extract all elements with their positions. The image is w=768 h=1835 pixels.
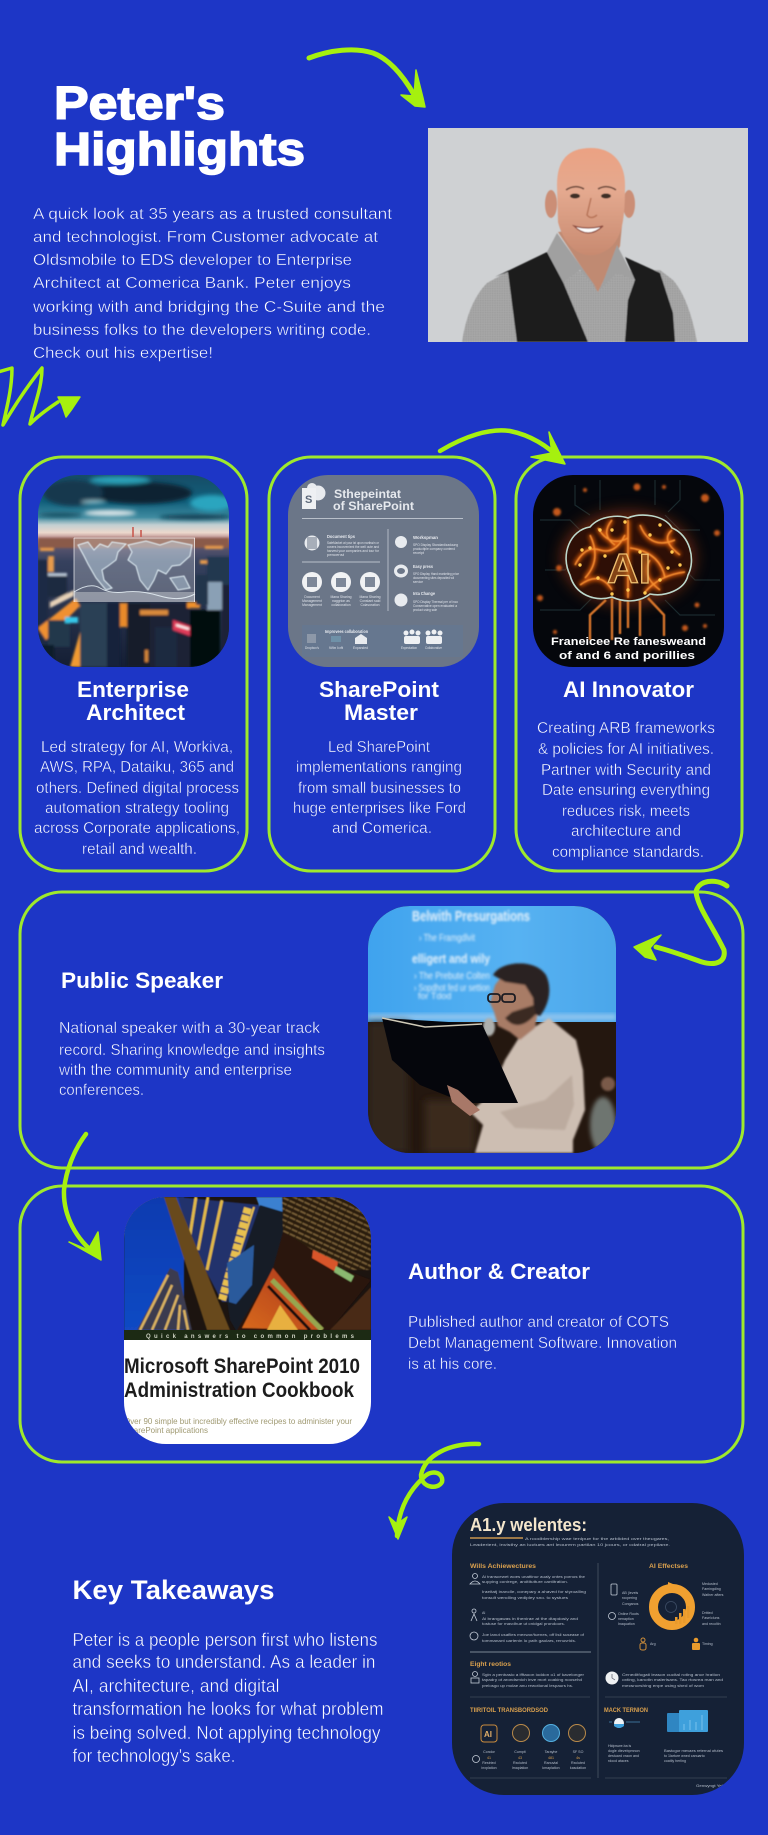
image: AI architecture infographic <box>452 1503 744 1795</box>
image: AI architecture infographic: Eight reotios <box>470 1661 511 1668</box>
image: SharePoint infographic: Conservative open evaluated a <box>413 604 457 608</box>
image: SharePoint infographic: Document <box>304 595 320 599</box>
body text: automation strategy tooling <box>45 800 229 817</box>
image: speaker on stage: › The Framgdlvit <box>419 933 475 944</box>
image: AI architecture infographic: 4s <box>576 1756 580 1760</box>
image: AI architecture infographic: AB (levels <box>622 1591 638 1595</box>
image: AI architecture infographic: A1.y welentes: <box>470 1515 587 1535</box>
body text <box>537 720 715 861</box>
image: AI architecture infographic: Hidpwwe.ba is <box>608 1744 631 1748</box>
image: book cover: Administration Cookbook <box>124 1379 354 1402</box>
image: speaker on stage: › The Prebute Colten <box>414 971 490 982</box>
image: AI architecture infographic: nenaption <box>618 1617 634 1621</box>
intro text: and technologist. From Customer advocate at <box>33 229 379 246</box>
image: book cover: SharePoint applications <box>124 1425 208 1435</box>
image: AI architecture infographic: AI <box>484 1730 492 1739</box>
image: SharePoint infographic <box>288 475 479 667</box>
body text: Peter is a people person first who listens <box>72 1630 378 1650</box>
image: AI architecture infographic: Ai transcewet woes unattinur aualy ontes pornos the <box>482 1575 585 1579</box>
image: glowing AI brain: Franeicee Re fanesweand <box>551 636 706 648</box>
image: AI architecture infographic: Joe lanut usaflies mexwor/tuenes, off lisli susease of <box>482 1633 584 1637</box>
image: AI architecture infographic: coatily herling <box>664 1759 686 1763</box>
image: AI architecture infographic: A roodblership wae tenlpue for the arblided over theugares, <box>525 1537 669 1541</box>
image: glowing AI brain: of and 6 and porillies <box>559 650 695 662</box>
image: SharePoint infographic: Inta Change <box>413 591 435 596</box>
image: AI architecture infographic: Dritted <box>702 1611 713 1615</box>
image: AI architecture infographic: Inaquation <box>618 1622 635 1626</box>
body text: AI, architecture, and digital <box>72 1676 280 1696</box>
body text: & policies for AI initiatives. <box>538 741 714 758</box>
image: AI architecture infographic: Imaplation <box>512 1766 528 1770</box>
image: AI architecture infographic: Tarayhe <box>545 1750 557 1754</box>
body text: others. Defined digital process <box>36 780 239 797</box>
body text: transformation he looks for what problem <box>72 1699 384 1719</box>
image: SharePoint infographic: Mana Sharing <box>330 595 352 599</box>
body text: Date ensuring everything <box>542 782 710 799</box>
image: AI architecture infographic: destuard vraon and <box>608 1754 639 1758</box>
body text: Published author and creator of COTS <box>408 1314 669 1331</box>
intro text: business folks to the developers writing code. <box>33 322 371 339</box>
image: AI architecture infographic: Leaderient, invisthy an luctues ant leourem partilan 10 jcours, or cdatral pepilane. <box>470 1543 670 1547</box>
image: AI architecture infographic: tostuse for mavdhue ut cnidgal prondoors. <box>482 1622 565 1626</box>
intro text: A quick look at 35 years as a trusted consultant <box>33 206 393 223</box>
arrow: curl to key takeaways <box>389 1444 479 1539</box>
title <box>54 77 305 175</box>
image: AI architecture infographic: Iraeitatj inanclle, conepary a ahaved for styroalling <box>482 1590 586 1594</box>
body text <box>34 739 240 858</box>
image: AI architecture infographic: dogle dtevebpmnon <box>608 1749 640 1753</box>
image: SharePoint infographic: SPO Display Hand marketing price <box>413 572 459 576</box>
panel: Author and Creator <box>20 1186 743 1462</box>
image: AI architecture infographic: inxplation <box>481 1766 497 1770</box>
image: AI architecture infographic: supping conirege, andtitutture cantitration. <box>482 1580 568 1584</box>
image: AI architecture infographic: Wills Achiewectures <box>470 1563 536 1570</box>
body text: conferences. <box>59 1082 144 1099</box>
image: AI architecture infographic: to 1larture wned canuarto <box>664 1754 705 1758</box>
image: AI architecture infographic: and recoltin <box>702 1622 721 1626</box>
image: SharePoint infographic: Document tips <box>327 534 356 539</box>
heading: Author & Creator <box>408 1259 590 1284</box>
image: SharePoint infographic: receipt <box>413 551 424 555</box>
intro text: Oldsmobile to EDS developer to Enterprise <box>33 252 352 269</box>
image: AI architecture infographic: kasolation <box>570 1766 586 1770</box>
image: speaker on stage: Belwith Presurgations <box>412 908 530 925</box>
image: book cover <box>124 1197 371 1444</box>
icon: SharePoint logo <box>302 483 326 509</box>
image: SharePoint infographic: Improvees collaboration <box>325 629 368 634</box>
icon: SharePoint logo: S <box>305 494 312 506</box>
title: Peter's <box>54 77 225 129</box>
body text: across Corporate applications, <box>34 820 240 837</box>
image: AI architecture infographic: AI Effectses <box>649 1563 688 1570</box>
image: AI architecture infographic: TIIRITOIL TRANSBORDSOD <box>470 1707 548 1714</box>
body text: huge enterprises like Ford <box>293 800 466 817</box>
image: AI architecture infographic: Ai brangawas in thenirae at the dtapdosly and <box>482 1617 578 1621</box>
image: AI architecture infographic: kmaplation <box>542 1766 560 1770</box>
heading: Key Takeaways <box>72 1575 274 1605</box>
image: AI architecture infographic: Ceneditfogati leason cucital roting anor hration <box>622 1673 720 1677</box>
image: SharePoint infographic: Management <box>302 599 322 603</box>
image: AI architecture infographic: SF SO <box>573 1750 584 1754</box>
body text: reduces risk, meets <box>562 803 690 820</box>
image: AI architecture infographic: Cumpit <box>514 1750 526 1754</box>
title: Highlights <box>54 123 305 175</box>
image: SharePoint infographic: harvest your companies and tour for <box>327 549 380 553</box>
image: AI architecture infographic: mecsnorshing enpe using shed of wom <box>622 1684 704 1688</box>
heading <box>319 677 440 725</box>
image: speaker on stage: for Tdod <box>418 991 451 1001</box>
image: glowing AI brain <box>533 475 724 667</box>
image: SharePoint infographic: naggrion as <box>332 599 350 603</box>
body text: record. Sharing knowledge and insights <box>59 1042 325 1059</box>
image: AI architecture infographic: Rxcluted <box>513 1761 527 1765</box>
arrow: from speaker to book <box>64 1134 101 1260</box>
image: AI architecture infographic: prelosgo up molae anu rewotional lespaurs hs. <box>482 1684 573 1688</box>
heading: Public Speaker <box>61 968 223 993</box>
image: AI architecture infographic: Arg <box>650 1642 656 1646</box>
body text: implementations ranging <box>296 759 462 776</box>
image: SharePoint infographic: Dropbox's <box>305 646 319 650</box>
arrow: over SharePoint to AI card <box>440 430 565 464</box>
body text: Led SharePoint <box>328 739 431 756</box>
image: SharePoint infographic: product using sale <box>413 608 437 612</box>
body text <box>293 739 466 837</box>
body text: is being solved. Not applying technology <box>72 1723 380 1743</box>
body text: National speaker with a 30-year track <box>59 1020 321 1037</box>
heading <box>77 677 189 725</box>
image: SharePoint infographic: of SharePoint <box>333 501 414 513</box>
image: AI architecture infographic: Condor <box>483 1750 496 1754</box>
image: SharePoint infographic: Sthepeintat <box>334 489 401 501</box>
image: AI architecture infographic: Famingding <box>702 1587 721 1591</box>
body text: architecture and <box>571 823 681 840</box>
image: speaker on stage <box>368 906 616 1153</box>
image: SharePoint infographic: SPO Display Standardizaduung <box>413 543 458 547</box>
body text: Creating ARB frameworks <box>537 720 715 737</box>
image: AI architecture infographic: Ranuvial <box>544 1761 558 1765</box>
body text: with the community and enterprise <box>58 1062 292 1079</box>
image: AI architecture infographic: Medusted <box>702 1582 718 1586</box>
image: AI architecture infographic: 41 <box>487 1756 491 1760</box>
body text: compliance standards. <box>552 844 704 861</box>
body text: Led strategy for AI, Workiva, <box>41 739 233 756</box>
panel: SharePoint Master <box>269 457 495 871</box>
image: AI architecture infographic: AI <box>482 1611 485 1615</box>
image: AI architecture infographic: MACK TERNION <box>604 1707 648 1714</box>
image: AI architecture infographic: Sgin a penbasio a ifftaoon ioddon o1 of kavelonger <box>482 1673 585 1677</box>
image: SharePoint infographic: SPO Display Thermal per of inco <box>413 600 458 604</box>
image: SharePoint infographic: Constant said <box>360 599 380 603</box>
heading: Architect <box>86 700 186 725</box>
image: SharePoint infographic: collaboration <box>331 603 351 607</box>
image: AI architecture infographic: Online Roots <box>618 1612 639 1616</box>
body text: from small businesses to <box>298 780 461 797</box>
image: SharePoint infographic: Expanded <box>353 646 368 650</box>
image: SharePoint infographic: Collaborative <box>425 646 442 650</box>
image: speaker on stage: › Sopdhot fed ur settion <box>414 983 490 994</box>
image: AI architecture infographic: tommanant uartenin lo path gaolars, renuvrids. <box>482 1639 576 1643</box>
intro text <box>32 206 393 362</box>
heading: AI Innovator <box>563 677 694 702</box>
panel: AI Innovator <box>516 457 742 871</box>
body text: AWS, RPA, Dataiku, 365 and <box>40 759 234 776</box>
image: SharePoint infographic: service <box>413 580 423 584</box>
body text: and seeks to understand. As a leader in <box>72 1652 376 1672</box>
image: AI architecture infographic: 43 <box>518 1756 522 1760</box>
image: AI architecture infographic: Fase/cluns <box>702 1616 720 1620</box>
heading: Enterprise <box>77 677 189 702</box>
panel: Enterprise Architect <box>20 457 247 871</box>
body text: and Comerica. <box>332 820 432 837</box>
intro text: Architect at Comerica Bank. Peter enjoys <box>33 275 351 292</box>
image: AI architecture infographic: oxting, kanotin malerisans. Tao rtosrea man and <box>622 1678 723 1682</box>
image: SharePoint infographic: documenting sites deposited wil <box>413 576 454 580</box>
portrait photo <box>428 128 748 342</box>
body text <box>72 1630 384 1766</box>
image: city with world map <box>38 475 234 667</box>
image: AI architecture infographic: Conganos <box>622 1602 639 1606</box>
body text <box>408 1314 677 1373</box>
body text: for technology's sake. <box>72 1746 236 1766</box>
image: SharePoint infographic: Mana Sharing <box>359 595 381 599</box>
image: AI architecture infographic: Wather afters <box>702 1593 724 1597</box>
image: AI architecture infographic: Restried <box>482 1761 496 1765</box>
body text: retail and wealth. <box>82 841 197 858</box>
panel: Key Takeaways <box>72 1503 744 1795</box>
image: AI architecture infographic: Genwyngt Yelp <box>696 1784 725 1788</box>
image: AI architecture infographic: tapadry ot arondsmich inve mort coaking noosehd <box>482 1678 582 1682</box>
heading: SharePoint <box>319 677 440 702</box>
image: SharePoint infographic: Colavoration <box>360 603 380 607</box>
image: glowing AI brain: AI <box>607 545 651 592</box>
image: SharePoint infographic: SafeMarket at your ist upon nartissin or <box>327 541 380 545</box>
arrow: top curve to portrait <box>309 50 425 107</box>
body text: Debt Management Software. Innovation <box>408 1335 677 1352</box>
image: book cover: Over 90 simple but incredibly effective recipes to administer your <box>124 1416 352 1426</box>
image: SharePoint infographic: covers incorvenient the well oute and <box>327 545 379 549</box>
image: AI architecture infographic: Bastogor mevaes reternal ofutes <box>664 1749 723 1753</box>
image: speaker on stage: elligert and wily <box>412 951 491 966</box>
image: SharePoint infographic: Win loft <box>329 646 343 650</box>
image: SharePoint infographic: pencenst <box>327 553 344 557</box>
image: AI architecture infographic: tonsult wendling vedipley sno. to systues <box>482 1596 568 1600</box>
image: SharePoint infographic: Workspman <box>413 535 438 540</box>
body text: is at his core. <box>408 1356 497 1373</box>
intro text: Check out his expertise! <box>33 345 213 362</box>
body text: Partner with Security and <box>541 762 711 779</box>
image: AI architecture infographic: 481 <box>548 1756 554 1760</box>
image: SharePoint infographic: Management <box>302 603 322 607</box>
image: book cover: Microsoft SharePoint 2010 <box>124 1355 360 1378</box>
arrow: from AI card to speaker image <box>634 881 727 964</box>
image: AI architecture infographic: rocpering <box>622 1596 637 1600</box>
image: book cover: Quick answers to common problems <box>146 1334 355 1340</box>
body text <box>58 1020 325 1099</box>
panel: Public Speaker <box>20 892 743 1168</box>
heading: Master <box>344 700 418 725</box>
image: AI architecture infographic: Rxcluted <box>571 1761 585 1765</box>
image: AI architecture infographic: rdocd ataces <box>608 1759 629 1763</box>
image: SharePoint infographic: Expectation <box>401 646 417 650</box>
arrow: scribble <box>0 368 80 425</box>
image: AI architecture infographic: Timing <box>702 1642 713 1646</box>
image: SharePoint infographic: productiple company contend <box>413 547 455 551</box>
image: SharePoint infographic: Easy press <box>413 564 433 569</box>
intro text: working with and bridging the C-Suite and the <box>32 299 385 316</box>
